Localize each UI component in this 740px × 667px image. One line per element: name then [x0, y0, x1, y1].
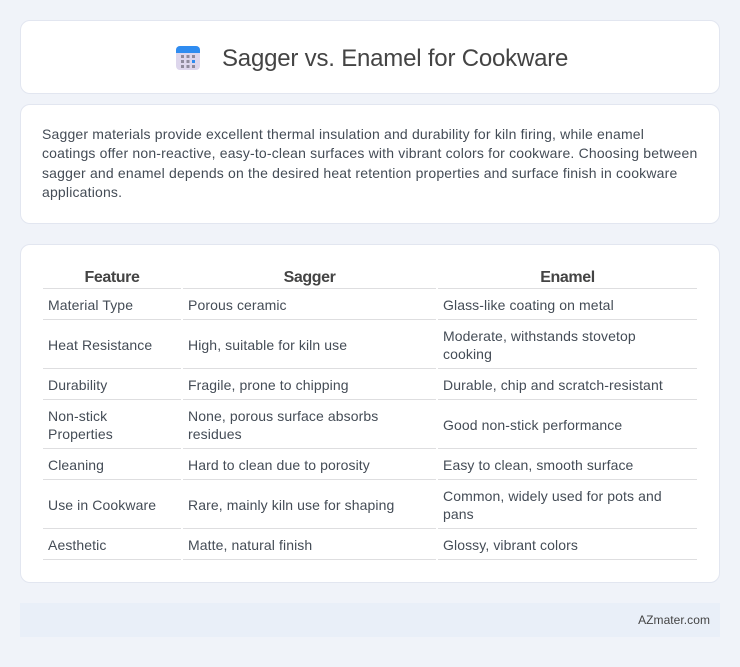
table panel [20, 244, 720, 583]
row: Material Type: Glass-like coating on metal [443, 297, 614, 313]
row: Use in Cookware [48, 488, 662, 522]
row: Aesthetic: Aesthetic [48, 537, 106, 553]
row: Material Type [48, 297, 614, 313]
row: Durability [48, 377, 663, 393]
footer bar [20, 603, 720, 637]
row: Durability: Durability [48, 377, 107, 393]
row: Use in Cookware: Use in Cookware [48, 497, 156, 513]
row: Cleaning: Hard to clean due to porosity [188, 457, 370, 473]
intro text [42, 126, 697, 200]
row: Heat Resistance: cooking [443, 346, 492, 362]
row: Durability: Durable, chip and scratch-resistant [443, 377, 663, 393]
row: Non-stick Properties [48, 408, 622, 442]
icon: calendar [176, 46, 200, 70]
row: Use in Cookware: Common, widely used for pots and [443, 488, 662, 504]
footer credit: AZmater.com [638, 613, 710, 627]
row: Material Type: Porous ceramic [188, 297, 287, 313]
row: Material Type: Material Type [48, 297, 133, 313]
title: Sagger vs. Enamel for Cookware [222, 45, 568, 72]
intro text: applications. [42, 184, 122, 200]
row: Use in Cookware: Rare, mainly kiln use for shaping [188, 497, 394, 513]
header: Feature: Feature [84, 269, 140, 286]
row: Non-stick Properties: Properties [48, 426, 113, 442]
row: Use in Cookware: pans [443, 506, 474, 522]
row: Aesthetic: Glossy, vibrant colors [443, 537, 578, 553]
row: Non-stick Properties: None, porous surface absorbs [188, 408, 378, 424]
row: Durability: Fragile, prone to chipping [188, 377, 349, 393]
intro text: sagger and enamel depends on the desired heat retention properties and surface finish in cookware [42, 165, 677, 181]
row: Heat Resistance: Moderate, withstands stovetop [443, 328, 636, 344]
row: Heat Resistance: Heat Resistance [48, 337, 152, 353]
row: Aesthetic [48, 537, 578, 553]
header: Enamel: Enamel [540, 269, 595, 286]
row: Cleaning: Easy to clean, smooth surface [443, 457, 633, 473]
row: Non-stick Properties: Good non-stick performance [443, 417, 622, 433]
header: Sagger: Sagger [284, 269, 335, 286]
row: Heat Resistance [48, 328, 636, 362]
row: Cleaning: Cleaning [48, 457, 104, 473]
row: Non-stick Properties: residues [188, 426, 242, 442]
row: Heat Resistance: High, suitable for kiln use [188, 337, 347, 353]
title panel [20, 20, 720, 94]
row: Aesthetic: Matte, natural finish [188, 537, 312, 553]
intro text: coatings offer non-reactive, easy-to-clean surfaces with vibrant colors for cookware. Choosing between [42, 145, 697, 161]
intro text: Sagger materials provide excellent thermal insulation and durability for kiln firing, while enamel [42, 126, 644, 142]
row: Cleaning [48, 457, 633, 473]
intro panel [20, 104, 720, 224]
row: Non-stick Properties: Non-stick [48, 408, 107, 424]
